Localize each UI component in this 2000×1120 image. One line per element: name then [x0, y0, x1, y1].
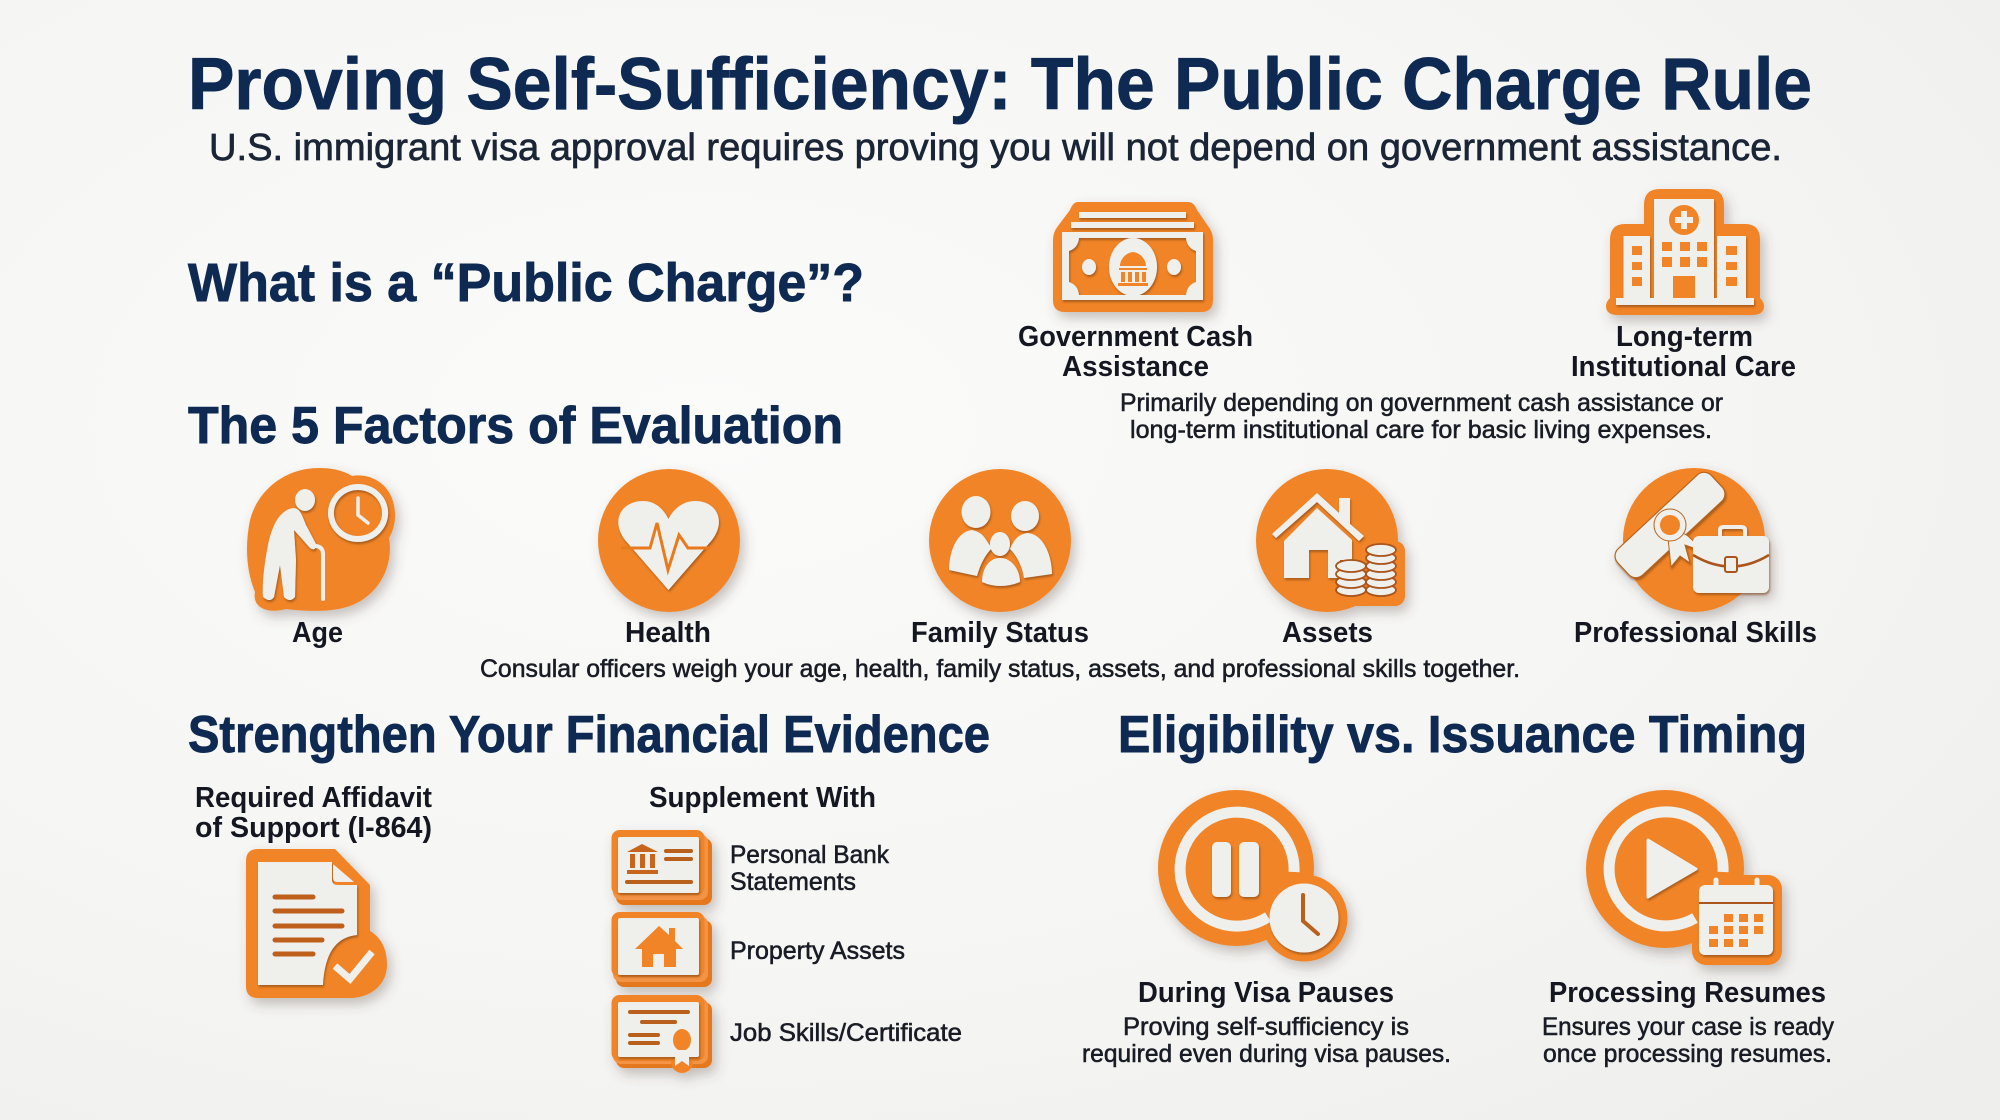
label: processing resumes: once processing resumes. [1543, 1040, 1832, 1068]
label: supplement with: Supplement With [649, 782, 876, 814]
label: government cash assistance: Government Cash [1018, 321, 1253, 353]
icon: visa pause [1158, 790, 1348, 962]
label: job skills certificate: Job Skills/Certificate [730, 1019, 962, 1047]
icon: job skills certificate [612, 995, 712, 1073]
label: during visa pauses: Proving self-sufficiency is [1123, 1013, 1409, 1041]
title: Proving Self-Sufficiency: The Public Charge Rule [188, 44, 1812, 125]
label: during visa pauses: During Visa Pauses [1138, 977, 1394, 1009]
label: during visa pauses [1082, 977, 1451, 1068]
icon: age [247, 468, 395, 611]
label: during visa pauses: required even during visa pauses. [1082, 1040, 1451, 1068]
text: factors summary: Consular officers weigh your age, health, family status, assets, and professional skills together. [480, 655, 1520, 683]
text: public charge definition: Primarily depending on government cash assistance or [1120, 389, 1723, 417]
heading: what is a public charge: What is a “Public Charge”? [188, 253, 864, 313]
text: public charge definition: long-term institutional care for basic living expenses. [1130, 416, 1712, 444]
label: processing resumes [1542, 977, 1834, 1068]
label: processing resumes: Processing Resumes [1549, 977, 1826, 1009]
label: required affidavit: Required Affidavit [195, 782, 432, 814]
label: required affidavit [195, 782, 432, 844]
icon: health [598, 469, 740, 612]
heading: eligibility vs issuance timing: Eligibility vs. Issuance Timing [1118, 706, 1807, 764]
label: property assets: Property Assets [730, 937, 905, 965]
label: assets: Assets [1282, 617, 1373, 649]
heading: the 5 factors: The 5 Factors of Evaluation [188, 397, 843, 455]
label: long-term institutional care: Institutional Care [1571, 351, 1796, 383]
icon: affidavit document [246, 849, 387, 998]
icon: family status [929, 469, 1071, 612]
icon: bank statements [612, 830, 712, 905]
label: personal bank statements: Personal Bank [730, 841, 889, 869]
label: government cash assistance: Assistance [1062, 351, 1209, 383]
icon: professional skills [1611, 468, 1769, 612]
label: personal bank statements: Statements [730, 868, 856, 896]
text: public charge definition [1120, 389, 1723, 444]
label: long-term institutional care [1571, 321, 1796, 383]
subtitle: U.S. immigrant visa approval requires proving you will not depend on government assistance. [209, 127, 1782, 169]
heading: strengthen your financial evidence: Strengthen Your Financial Evidence [188, 706, 990, 764]
label: age: Age [292, 617, 343, 649]
label: required affidavit: of Support (I-864) [195, 812, 432, 844]
label: professional skills: Professional Skills [1574, 617, 1817, 649]
icon: assets [1256, 469, 1405, 612]
label: health: Health [625, 617, 711, 649]
icon: property assets [612, 912, 712, 987]
label: processing resumes: Ensures your case is ready [1542, 1013, 1834, 1041]
icon: processing resumes [1586, 790, 1782, 965]
icon: government cash [1053, 202, 1213, 312]
label: long-term institutional care: Long-term [1616, 321, 1753, 353]
label: personal bank statements [730, 841, 889, 896]
icon: long-term care hospital [1606, 189, 1764, 315]
label: family status: Family Status [911, 617, 1089, 649]
label: government cash assistance [1018, 321, 1253, 383]
